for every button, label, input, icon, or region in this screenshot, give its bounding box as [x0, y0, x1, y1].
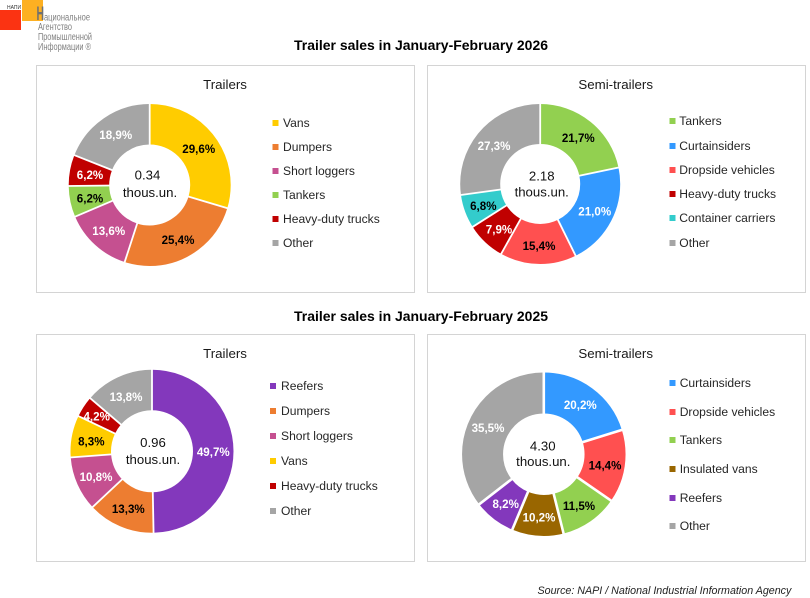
logo: NAPI: Информации ® — [38, 41, 91, 53]
logo: NAPI — [0, 0, 92, 53]
legend: Tankers — [283, 188, 325, 202]
legend: Heavy-duty trucks — [281, 479, 378, 493]
legend: Vans — [283, 116, 310, 130]
legend: Other — [281, 504, 311, 518]
title: 2026: Trailer sales in January-February 2026 — [294, 38, 548, 53]
panel title: Semi-trailers — [578, 346, 653, 361]
legend: Short loggers — [281, 429, 353, 443]
donut chart: semi-trailers 2025: 11,5% — [563, 500, 595, 513]
legend: Curtainsiders — [680, 376, 751, 390]
panel title: Trailers — [203, 77, 247, 92]
legend — [272, 116, 380, 250]
donut chart: semi-trailers 2026 — [459, 102, 620, 258]
legend: Vans — [281, 454, 308, 468]
legend: Container carriers — [679, 211, 775, 225]
donut chart: semi-trailers 2025: 14,4% — [589, 460, 621, 472]
donut chart: semi-trailers 2025: 4.30 — [530, 438, 556, 454]
legend: Short loggers — [283, 164, 355, 178]
donut chart: trailers 2026: 0.34 — [135, 168, 160, 182]
title: 2025: Trailer sales in January-February 2025 — [294, 309, 548, 324]
logo: NAPI: Промышленной — [38, 32, 92, 43]
donut chart: semi-trailers 2026: 2.18 — [529, 168, 555, 184]
logo: NAPI: Агентство — [38, 22, 72, 33]
legend: Insulated vans — [680, 462, 758, 476]
donut chart: trailers 2025: 4,2% — [83, 410, 110, 424]
panel: semi-trailers 2025 — [428, 334, 806, 562]
donut chart: semi-trailers 2026: 15,4% — [523, 240, 555, 253]
logo: NAPI: НАПИ — [7, 5, 21, 11]
donut chart: semi-trailers 2025: 20,2% — [564, 399, 597, 412]
legend — [670, 376, 775, 533]
legend: Reefers — [680, 491, 722, 505]
donut chart: trailers 2025 — [68, 367, 230, 535]
donut chart: trailers 2025: 8,3% — [78, 436, 105, 448]
legend — [670, 114, 776, 250]
legend: Dropside vehicles — [680, 405, 775, 419]
donut chart: trailers 2026 — [67, 102, 229, 264]
donut chart: trailers 2025: 13,8% — [110, 391, 142, 404]
legend: Dropside vehicles — [679, 163, 775, 177]
legend: Other — [283, 236, 313, 250]
donut chart: trailers 2026: 13,6% — [92, 225, 125, 238]
donut chart: trailers 2025: 0.96 — [140, 435, 166, 450]
legend — [270, 379, 378, 518]
logo: NAPI: Н — [36, 4, 44, 25]
donut chart: trailers 2026: 6,2% — [77, 169, 103, 182]
panel title: Trailers — [203, 346, 247, 361]
legend: Dumpers — [281, 404, 330, 418]
donut chart: semi-trailers 2026: 21,7% — [562, 132, 595, 145]
donut chart: trailers 2026: 29,6% — [182, 143, 215, 156]
donut chart: semi-trailers 2025: 10,2% — [523, 512, 555, 524]
donut chart: semi-trailers 2026: 7,9% — [486, 224, 512, 236]
donut chart: semi-trailers 2026: 21,0% — [578, 206, 611, 218]
panel: trailers 2026 — [36, 66, 414, 292]
donut chart: trailers 2025: 49,7% — [197, 446, 230, 459]
legend: Tankers — [679, 114, 722, 128]
legend: Tankers — [680, 433, 722, 447]
donut chart: trailers 2025: 13,3% — [112, 503, 145, 516]
logo: NAPI: ациональное — [44, 12, 90, 24]
legend: Other — [680, 519, 710, 533]
source note: Source: NAPI / National Industrial Information Agency — [538, 585, 792, 597]
donut chart: semi-trailers 2025 — [472, 370, 624, 536]
legend: Reefers — [281, 379, 323, 393]
legend: Heavy-duty trucks — [283, 212, 380, 226]
donut chart: trailers 2026: thous.un. — [123, 185, 177, 200]
donut chart: semi-trailers 2025: 35,5% — [472, 422, 504, 435]
donut chart: semi-trailers 2025: thous.un. — [516, 454, 570, 469]
panel: trailers 2025 — [36, 334, 414, 562]
donut chart: semi-trailers 2026: 6,8% — [470, 200, 497, 213]
panel title: Semi-trailers — [578, 77, 653, 92]
donut chart: trailers 2026: 25,4% — [162, 234, 194, 247]
panel: semi-trailers 2026 — [428, 66, 806, 292]
legend: Other — [679, 236, 710, 250]
donut chart: trailers 2026: 6,2% — [77, 192, 103, 206]
donut chart: semi-trailers 2026: thous.un. — [515, 184, 569, 200]
donut chart: semi-trailers 2025: 8,2% — [492, 498, 519, 511]
donut chart: semi-trailers 2026: 27,3% — [478, 140, 510, 153]
legend: Heavy-duty trucks — [679, 187, 776, 201]
donut chart: trailers 2026: 18,9% — [99, 129, 132, 142]
legend: Curtainsiders — [679, 139, 751, 153]
legend: Dumpers — [283, 140, 332, 154]
donut chart: trailers 2025: 10,8% — [80, 471, 112, 484]
donut chart: trailers 2025: thous.un. — [126, 452, 180, 467]
